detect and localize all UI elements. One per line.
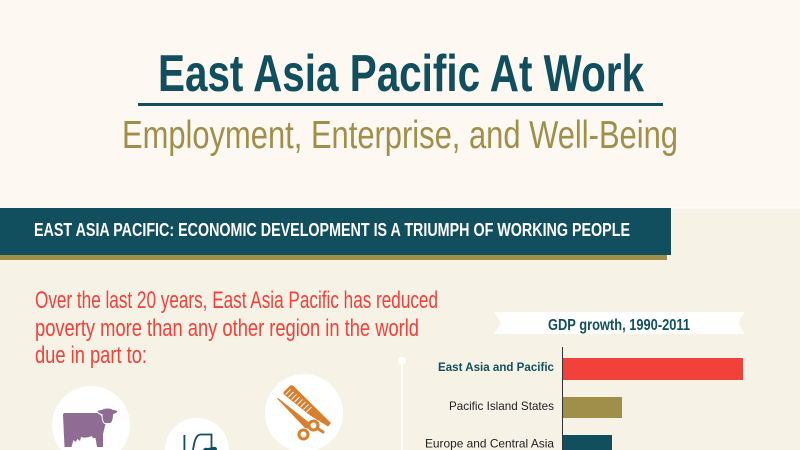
chart heading ribbon xyxy=(494,312,745,334)
chart heading ribbon: GDP growth, 1990-2011 xyxy=(548,317,690,334)
bar: Pacific Island States xyxy=(449,397,622,418)
intro text: poverty more than any other region in the world xyxy=(35,315,419,342)
icon: cow xyxy=(52,386,130,450)
intro text: Over the last 20 years, East Asia Pacific has reduced xyxy=(35,287,438,314)
bar: East Asia and Pacific: East Asia and Pacific xyxy=(438,360,554,374)
timeline marker xyxy=(398,357,406,450)
title: East Asia Pacific At Work xyxy=(158,45,644,103)
icon: forklift xyxy=(165,418,229,450)
section banner xyxy=(0,208,671,260)
bar: East Asia and Pacific xyxy=(438,358,743,380)
bar: Europe and Central Asia xyxy=(425,435,612,450)
intro text: due in part to: xyxy=(35,342,147,369)
intro text xyxy=(35,287,438,369)
section banner: EAST ASIA PACIFIC: ECONOMIC DEVELOPMENT IS A TRIUMPH OF WORKING PEOPLE xyxy=(34,220,630,240)
bar chart: GDP growth xyxy=(425,347,743,450)
bar: Pacific Island States: Pacific Island States xyxy=(449,399,554,413)
icon: comb and scissors xyxy=(265,374,343,450)
title rule xyxy=(138,103,663,106)
